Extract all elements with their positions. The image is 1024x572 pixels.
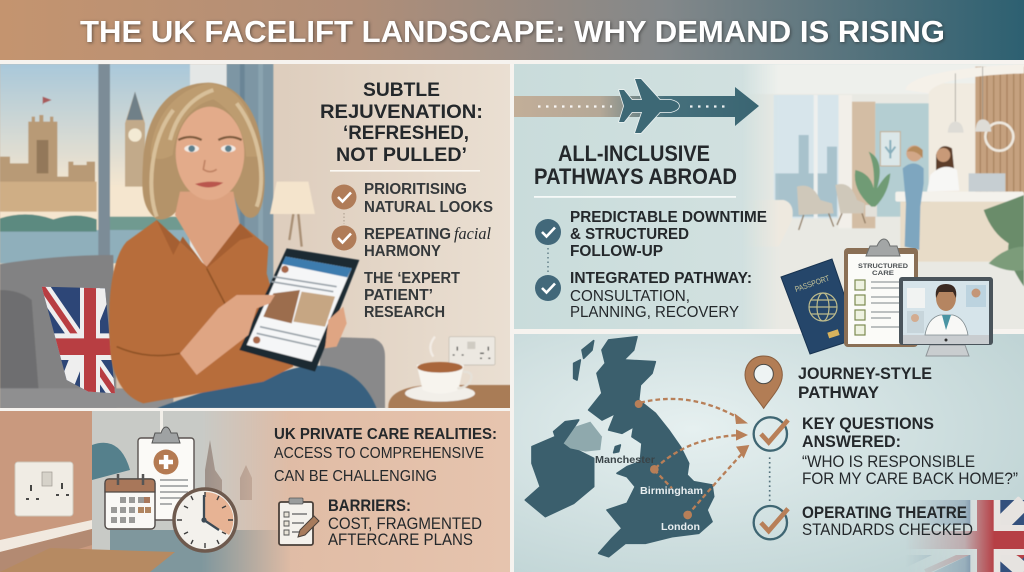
heading: all-inclusive pathways abroad (535, 146, 736, 184)
text: repeating facial harmony: REPEATING (364, 226, 451, 243)
icon: clock (174, 489, 236, 551)
illustration: structured care clipboard: STRUCTURED (858, 263, 909, 270)
panel: subtle rejuvenation (0, 64, 512, 413)
text: barriers (328, 497, 482, 549)
text: predictable downtime: FOLLOW-UP (570, 243, 663, 260)
icon: calendar (105, 474, 155, 529)
text: UK private care realities (274, 426, 497, 485)
text: integrated pathway: CONSULTATION, (570, 288, 690, 305)
illustration: telehealth monitor (899, 277, 993, 356)
hand (180, 295, 275, 375)
text: expert patient research: RESEARCH (364, 304, 445, 321)
text: barriers: COST, FRAGMENTED (328, 515, 482, 533)
route arrows (640, 399, 745, 515)
text: repeating facial harmony (365, 227, 491, 256)
icon: location pin (745, 356, 782, 408)
text: journey-style pathway (798, 368, 932, 398)
illustration: structured care clipboard: CARE (872, 270, 894, 277)
illustration: structured care clipboard (844, 239, 918, 347)
icon: check key questions (754, 417, 788, 451)
heading: all-inclusive pathways abroad: ALL-INCLUSIVE (558, 141, 710, 166)
label: Manchester: Manchester (595, 454, 655, 466)
icon: check downtime (535, 219, 561, 245)
heading: refreshed, not pulled: NOT PULLED’ (336, 144, 467, 166)
text: operating theatre standards (802, 506, 972, 535)
text: expert patient research: PATIENT’ (364, 287, 433, 304)
text: barriers: AFTERCARE PLANS (328, 531, 473, 549)
text: key questions answered: KEY QUESTIONS (802, 414, 934, 433)
text: key questions answered: ANSWERED: (802, 432, 901, 451)
text: UK private care realities: CAN BE CHALLENGING (274, 468, 437, 485)
heading: refreshed, not pulled: REJUVENATION: (320, 101, 483, 123)
map: UK and Ireland (525, 337, 788, 557)
panel: all-inclusive pathways abroad (514, 64, 1024, 351)
heading: refreshed, not pulled: ‘REFRESHED, (343, 122, 469, 144)
text: key questions answered: “WHO IS RESPONSIBLE (802, 452, 975, 471)
woman (109, 83, 377, 408)
text: UK private care realities: ACCESS TO COMPREHENSIVE (274, 445, 484, 462)
text: journey-style pathway: JOURNEY-STYLE (798, 365, 932, 383)
text: repeating facial harmony: HARMONY (364, 243, 442, 260)
text: repeating facial harmony: facial (454, 224, 491, 243)
illustration: woman in living room with tablet (0, 64, 512, 413)
icon: check pathway (535, 275, 561, 301)
text: prioritising natural looks (365, 183, 492, 212)
lamp (289, 214, 302, 247)
text: journey-style pathway: PATHWAY (798, 384, 879, 402)
heading: all-inclusive pathways abroad: PATHWAYS ABROAD (534, 164, 737, 189)
icon: plane (619, 79, 679, 133)
cushion: union flag (40, 285, 117, 395)
illustration: faded city window (92, 411, 292, 572)
icon: medical clipboard (138, 427, 194, 520)
side table and cup (388, 385, 512, 413)
wall with skirting and socket (0, 411, 175, 572)
illustration: passport (781, 259, 859, 354)
text: key questions answered (802, 418, 1018, 484)
illustration: passport: PASSPORT (794, 274, 831, 294)
text: expert patient research: THE ‘EXPERT (364, 270, 460, 287)
text: operating theatre standards: STANDARDS CHECKED (802, 520, 973, 539)
arrow with plane (514, 79, 759, 133)
text: expert patient research (364, 272, 460, 317)
illustration: clinic reception (753, 64, 1024, 329)
icon: checklist and pencil (279, 498, 319, 545)
title: THE UK FACELIFT LANDSCAPE: WHY DEMAND IS RISING (80, 14, 945, 49)
flag corner (905, 500, 1024, 572)
label: Birmingham: Birmingham (640, 485, 703, 497)
sofa (0, 254, 117, 389)
text: predictable downtime: PREDICTABLE DOWNTIME (570, 209, 767, 226)
text: prioritising natural looks: NATURAL LOOKS (364, 199, 493, 216)
icon: check natural looks (332, 184, 356, 210)
text: UK private care realities: UK PRIVATE CARE REALITIES: (274, 426, 497, 443)
text: barriers: BARRIERS: (328, 497, 411, 515)
text: integrated pathway (570, 270, 752, 321)
panel: journey-style pathway (514, 334, 1024, 572)
icon: check facial harmony (332, 226, 356, 250)
text: operating theatre standards: OPERATING THEATRE (802, 503, 967, 522)
socket (449, 337, 495, 365)
heading: refreshed, not pulled (321, 82, 481, 161)
tablet (239, 248, 359, 372)
panel: UK private care realities (0, 411, 510, 572)
text: predictable downtime (570, 211, 766, 256)
text: predictable downtime: & STRUCTURED (570, 226, 689, 243)
label: London: London (661, 521, 700, 533)
header banner (0, 0, 1024, 60)
icon: check theatre standards (754, 506, 788, 539)
text: prioritising natural looks: PRIORITISING (364, 181, 467, 198)
text: integrated pathway: PLANNING, RECOVERY (570, 304, 739, 321)
heading: refreshed, not pulled: SUBTLE (363, 79, 440, 101)
text: integrated pathway: INTEGRATED PATHWAY: (570, 270, 752, 287)
